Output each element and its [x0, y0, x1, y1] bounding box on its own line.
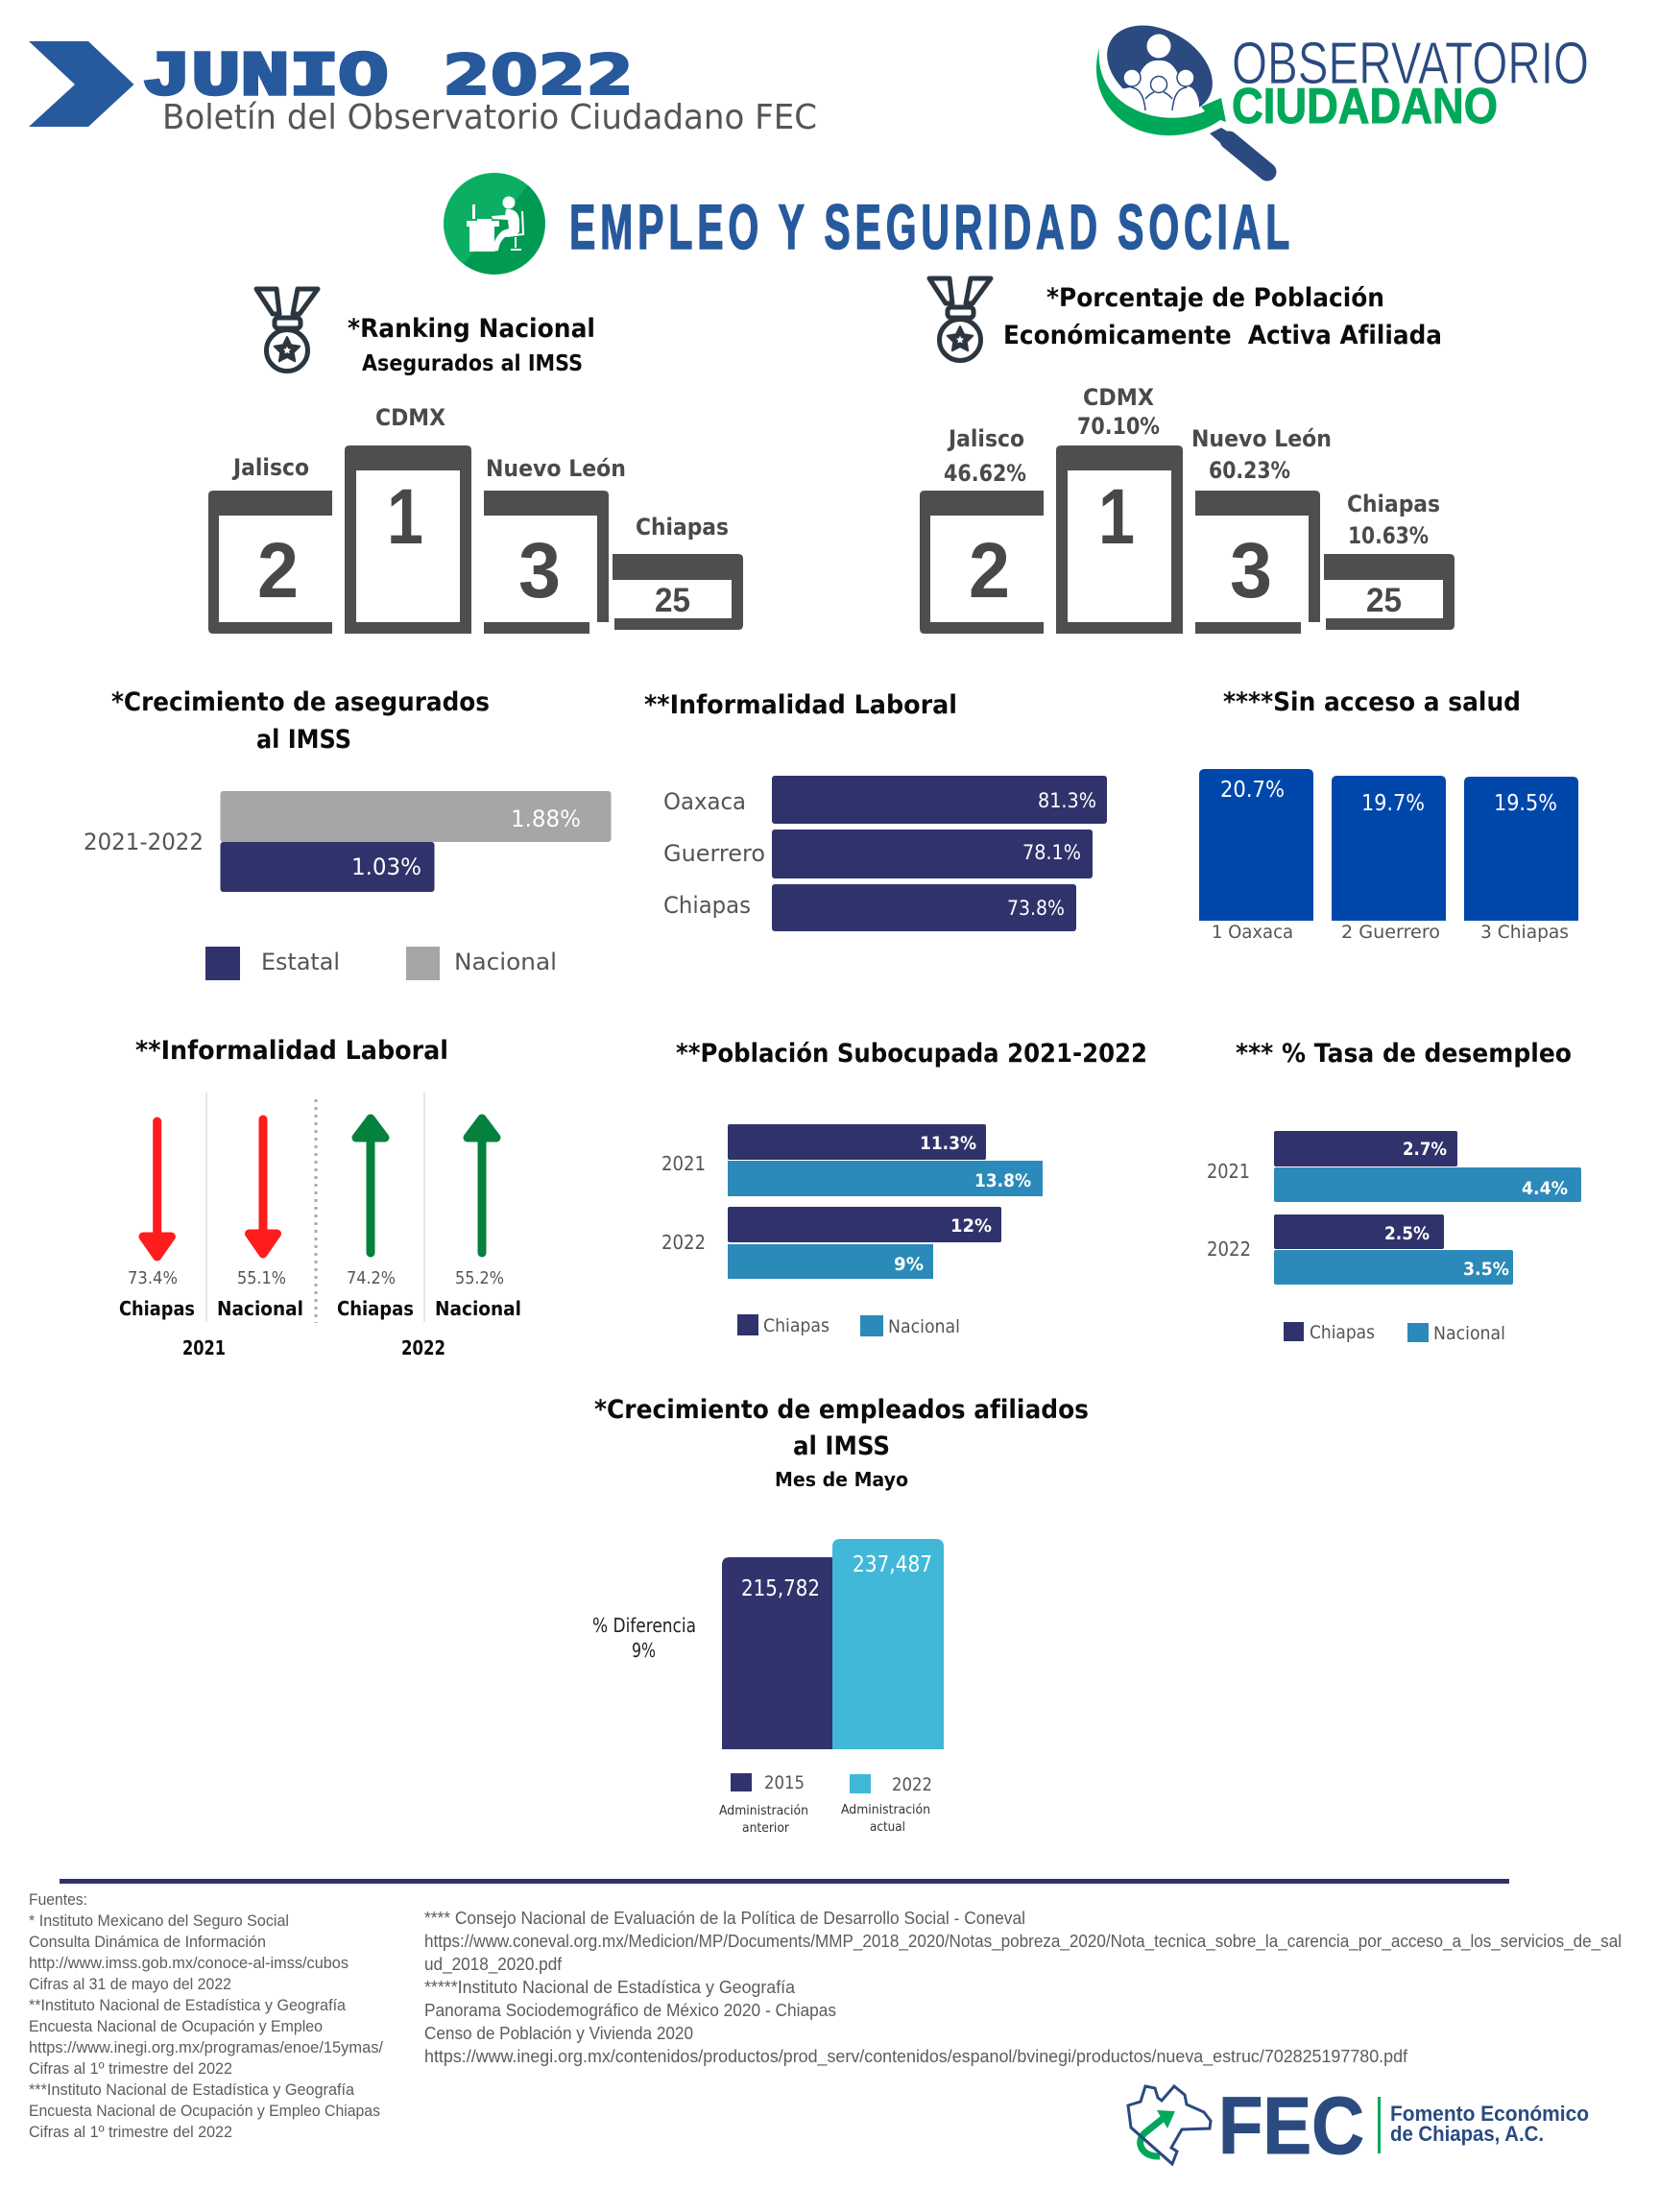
chart: flechas informalidad: Chiapas: [337, 1297, 414, 1320]
text block: fuentes derecha: Censo de Población y Vivienda 2020: [424, 2024, 693, 2043]
chart: flechas informalidad: [119, 1093, 521, 1359]
podium: porcentaje: 46.62%: [944, 460, 1026, 487]
heading: Tasa de desempleo: *** % Tasa de desempleo: [1236, 1039, 1572, 1069]
bar chart: informalidad por estado: Chiapas: [663, 892, 751, 919]
text block: fuentes derecha: **** Consejo Nacional de Evaluación de la Política de Desarrollo Social - Coneval: [424, 1909, 1025, 1928]
bar chart: población subocupada: Chiapas: [763, 1315, 830, 1336]
bar chart: informalidad por estado: 73.8%: [1007, 897, 1065, 920]
chart: flechas informalidad: 2022: [401, 1336, 445, 1359]
title: Junio 2022: 2022: [443, 42, 634, 108]
title: Junio 2022: JUNIO: [142, 42, 388, 113]
podium: porcentaje: CDMX: [1083, 384, 1154, 411]
bar chart: población subocupada: 12%: [950, 1215, 992, 1237]
chart: flechas informalidad: Nacional: [435, 1297, 521, 1320]
bar chart: empleados afiliados: 237,487: [853, 1552, 932, 1577]
podium: ranking nacional: 3: [518, 527, 561, 614]
podium: ranking nacional: Jalisco: [231, 454, 309, 481]
bar chart: población subocupada: 13.8%: [974, 1170, 1031, 1191]
bar chart: crecimiento de asegurados: 1.03%: [351, 854, 421, 880]
bar chart: crecimiento de asegurados: [84, 791, 611, 980]
text block: fuentes derecha: *****Instituto Nacional de Estadística y Geografía: [424, 1978, 796, 1997]
logo: FEC: [1128, 2080, 1589, 2171]
podium: ranking nacional: 1: [387, 473, 423, 561]
text block: fuentes derecha: https://www.coneval.org.mx/Medicion/MP/Documents/MMP_2018_2020/Notas_pobreza_2020/Nota_tecnica_sobre_la_carencia_por_acceso_a_los_servicios_de_sal: [424, 1932, 1622, 1952]
bar chart: sin acceso a salud: 19.7%: [1361, 791, 1425, 816]
logo: Observatorio Ciudadano: [1092, 8, 1589, 172]
subtitle: Boletín: Boletín del Observatorio Ciudadano FEC: [162, 98, 817, 137]
bar chart: informalidad por estado: 81.3%: [1038, 789, 1096, 812]
podium: porcentaje: 1: [1098, 473, 1135, 561]
podium: porcentaje: 70.10%: [1077, 413, 1160, 440]
text block: fuentes izquierda: Encuesta Nacional de Ocupación y Empleo: [29, 2017, 323, 2035]
heading: Crecimiento de empleados afiliados: [594, 1395, 1089, 1491]
heading: Ranking Nacional: [348, 314, 595, 376]
podium: ranking nacional: CDMX: [375, 404, 445, 431]
podium: porcentaje: 10.63%: [1348, 522, 1429, 549]
podium: porcentaje: Nuevo León: [1191, 425, 1332, 452]
text block: fuentes izquierda: Cifras al 1º trimestre del 2022: [29, 2059, 232, 2078]
bar chart: empleados afiliados: actual: [870, 1819, 905, 1835]
podium: porcentaje: 3: [1230, 527, 1272, 614]
bar chart: población subocupada: 9%: [894, 1254, 924, 1275]
podium: porcentaje: 25: [1366, 582, 1402, 619]
heading: Crecimiento de empleados afiliados: *Crecimiento de empleados afiliados: [594, 1395, 1089, 1425]
bar chart: población subocupada: 2021: [661, 1152, 706, 1175]
icon: medal left: [256, 289, 318, 371]
podium: ranking nacional: 2: [257, 527, 299, 614]
bar chart: empleados afiliados: 2015: [764, 1772, 805, 1793]
bar chart: empleados afiliados: [592, 1539, 944, 1836]
heading: Ranking Nacional: *Ranking Nacional: [348, 314, 595, 344]
title: Junio 2022: [142, 42, 634, 113]
heading: Crecimiento de asegurados: *Crecimiento de asegurados: [111, 687, 490, 717]
arrow: Nacional 2021: [250, 1119, 276, 1254]
text block: fuentes izquierda: Consulta Dinámica de Información: [29, 1933, 266, 1951]
bar chart: sin acceso a salud: 1 Oaxaca: [1212, 922, 1293, 943]
chart: flechas informalidad: Chiapas: [119, 1297, 195, 1320]
chart: flechas informalidad: Nacional: [217, 1297, 303, 1320]
icon: medal right: [929, 278, 991, 361]
podium: porcentaje: [920, 384, 1455, 634]
podium: ranking nacional: Nuevo León: [486, 455, 626, 482]
text block: fuentes izquierda: * Instituto Mexicano del Seguro Social: [29, 1911, 289, 1930]
heading: Crecimiento de asegurados: al IMSS: [256, 725, 351, 755]
bar chart: tasa de desempleo: [1207, 1131, 1581, 1344]
text block: fuentes izquierda: [29, 1890, 383, 2141]
heading: Crecimiento de asegurados: [111, 687, 490, 755]
bar chart: población subocupada: 2022: [661, 1231, 706, 1254]
arrow: Chiapas 2022: [356, 1118, 385, 1253]
bar chart: informalidad por estado: Guerrero: [663, 840, 765, 867]
bar chart: crecimiento de asegurados: Nacional: [454, 949, 557, 975]
bar chart: crecimiento de asegurados: Estatal: [261, 949, 340, 975]
heading: Informalidad Laboral: **Informalidad Laboral: [644, 690, 957, 720]
heading: Población Subocupada: **Población Subocupada 2021-2022: [676, 1039, 1147, 1069]
logo: FEC: Fomento Económico: [1390, 2102, 1589, 2126]
bar chart: tasa de desempleo: Chiapas: [1310, 1322, 1375, 1343]
chart: flechas informalidad: 73.4%: [128, 1268, 178, 1288]
heading: Porcentaje de Población: Económicamente Activa Afiliada: [1003, 321, 1442, 350]
bar chart: sin acceso a salud: 20.7%: [1220, 778, 1285, 803]
logo: FEC: FEC: [1218, 2080, 1364, 2171]
text block: fuentes derecha: ud_2018_2020.pdf: [424, 1955, 563, 1975]
bar chart: tasa de desempleo: Nacional: [1433, 1323, 1505, 1344]
bar chart: sin acceso a salud: 19.5%: [1494, 791, 1557, 816]
heading: Porcentaje de Población: *Porcentaje de Población: [1046, 283, 1384, 313]
text block: fuentes izquierda: Cifras al 31 de mayo del 2022: [29, 1975, 231, 1993]
bar chart: tasa de desempleo: 2022: [1207, 1238, 1251, 1261]
chart: flechas informalidad: 2021: [182, 1336, 226, 1359]
logo: FEC: de Chiapas, A.C.: [1390, 2122, 1544, 2146]
text block: fuentes izquierda: Cifras al 1º trimestre del 2022: [29, 2123, 232, 2141]
bar chart: tasa de desempleo: 4.4%: [1522, 1178, 1568, 1199]
bar chart: crecimiento de asegurados: 2021-2022: [84, 829, 204, 855]
podium: ranking nacional: [208, 404, 743, 634]
bar chart: sin acceso a salud: 3 Chiapas: [1480, 922, 1569, 943]
heading: Crecimiento de empleados afiliados: Mes de Mayo: [775, 1468, 908, 1491]
chart: flechas informalidad: 55.2%: [455, 1268, 504, 1288]
text block: fuentes izquierda: Fuentes:: [29, 1890, 87, 1909]
bar chart: sin acceso a salud: [1199, 769, 1578, 943]
text block: fuentes derecha: [424, 1909, 1622, 2067]
bar chart: empleados afiliados: anterior: [742, 1820, 789, 1836]
bar chart: informalidad por estado: [663, 776, 1107, 931]
heading: Sin acceso a salud: ****Sin acceso a salud: [1223, 687, 1521, 717]
podium: porcentaje: 2: [969, 527, 1010, 614]
icon: header chevron: [29, 41, 134, 127]
bar chart: empleados afiliados: Administración: [719, 1803, 808, 1818]
text block: fuentes derecha: https://www.inegi.org.mx/contenidos/productos/prod_serv/contenidos/espanol/bvinegi/productos/nueva_estruc/702825197780.pdf: [424, 2047, 1408, 2067]
bar chart: empleados afiliados: 215,782: [741, 1576, 820, 1601]
arrow: Chiapas 2021: [143, 1121, 171, 1257]
podium: ranking nacional: Chiapas: [636, 514, 729, 541]
bar chart: tasa de desempleo: 2.7%: [1403, 1139, 1447, 1160]
bar chart: empleados afiliados: 9%: [632, 1639, 656, 1662]
bar chart: tasa de desempleo: 2.5%: [1384, 1223, 1430, 1244]
bar chart: empleados afiliados: % Diferencia: [592, 1614, 696, 1637]
text block: fuentes izquierda: **Instituto Nacional de Estadística y Geografía: [29, 1996, 347, 2014]
bar chart: población subocupada: Nacional: [888, 1316, 960, 1337]
heading: Porcentaje de Población: [1003, 283, 1442, 350]
podium: porcentaje: Chiapas: [1347, 491, 1440, 517]
arrow: Nacional 2022: [468, 1118, 496, 1253]
text block: fuentes izquierda: https://www.inegi.org.mx/programas/enoe/15ymas/: [29, 2038, 383, 2056]
bar chart: sin acceso a salud: 2 Guerrero: [1341, 922, 1440, 943]
text block: fuentes izquierda: Encuesta Nacional de Ocupación y Empleo Chiapas: [29, 2102, 380, 2120]
text block: fuentes izquierda: http://www.imss.gob.mx/conoce-al-imss/cubos: [29, 1954, 349, 1972]
bar chart: empleados afiliados: Administración: [841, 1802, 930, 1817]
heading: Ranking Nacional: Asegurados al IMSS: [362, 351, 583, 376]
icon: worker at desk: [444, 173, 545, 275]
podium: porcentaje: 60.23%: [1209, 457, 1290, 484]
heading: Empleo y Seguridad Social: EMPLEO Y SEGURIDAD SOCIAL: [569, 191, 1289, 262]
text block: fuentes derecha: Panorama Sociodemográfico de México 2020 - Chiapas: [424, 2001, 836, 2020]
podium: porcentaje: Jalisco: [947, 425, 1024, 452]
text block: fuentes izquierda: ***Instituto Nacional de Estadística y Geografía: [29, 2080, 355, 2099]
bar chart: población subocupada: [661, 1124, 1043, 1337]
bar chart: informalidad por estado: Oaxaca: [663, 788, 746, 815]
logo: Observatorio Ciudadano: CIUDADANO: [1232, 79, 1498, 134]
bar chart: población subocupada: 11.3%: [920, 1133, 976, 1154]
bar chart: informalidad por estado: 78.1%: [1022, 841, 1081, 864]
bar chart: empleados afiliados: 2022: [892, 1774, 932, 1795]
chart: flechas informalidad: 55.1%: [237, 1268, 286, 1288]
bar chart: tasa de desempleo: 2021: [1207, 1160, 1250, 1183]
heading: Crecimiento de empleados afiliados: al IMSS: [793, 1431, 890, 1461]
heading: Informalidad Laboral 2: **Informalidad Laboral: [135, 1036, 448, 1066]
bar chart: crecimiento de asegurados: 1.88%: [511, 805, 581, 832]
podium: ranking nacional: 25: [655, 582, 690, 619]
bar chart: tasa de desempleo: 3.5%: [1463, 1259, 1509, 1280]
chart: flechas informalidad: 74.2%: [347, 1268, 396, 1288]
